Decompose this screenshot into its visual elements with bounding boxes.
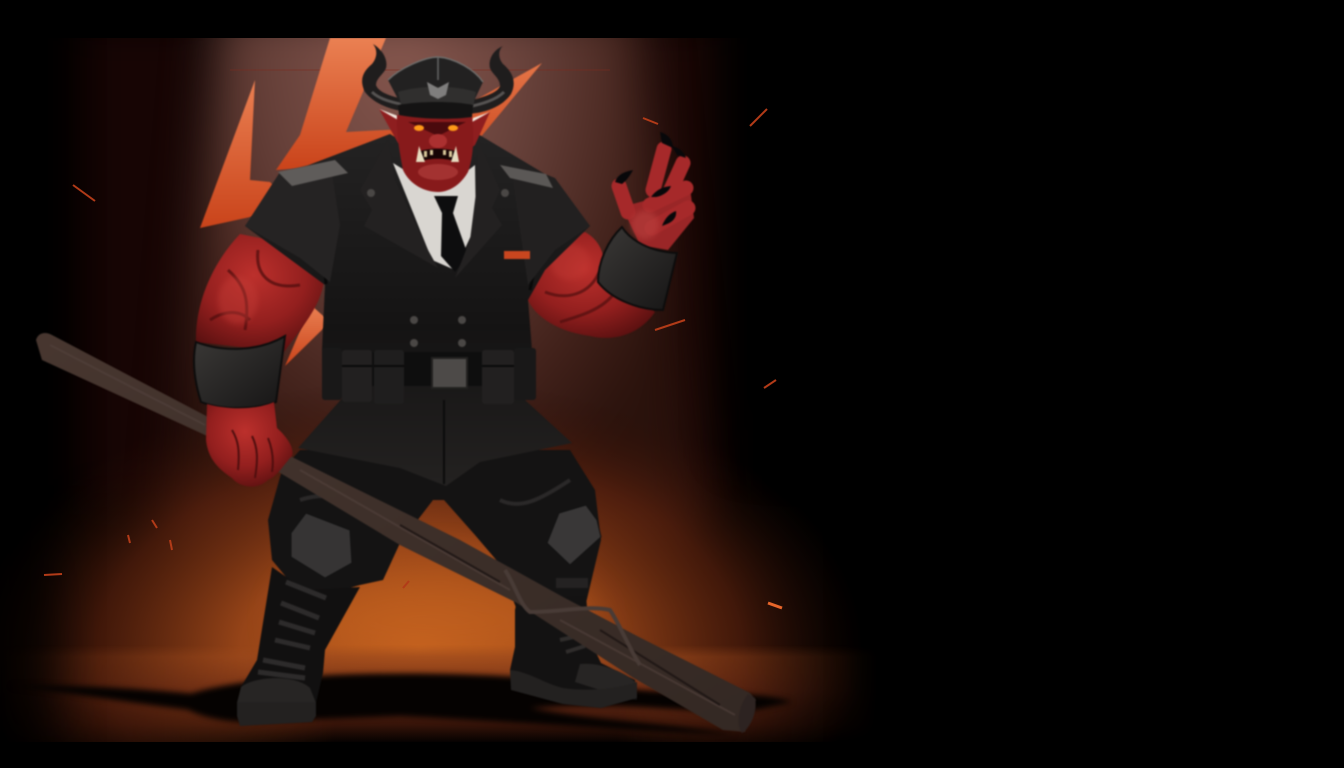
right sleeve — [510, 160, 590, 285]
orange smoke haze — [0, 378, 900, 768]
illustration: demon officer with staff — [16, 38, 859, 742]
face — [397, 115, 473, 192]
ember sparks — [44, 109, 782, 608]
right wrist bracer — [598, 227, 677, 310]
right hand with claws — [615, 132, 694, 250]
right boot — [510, 578, 637, 708]
left upper arm — [196, 234, 324, 352]
jacket buttons — [367, 189, 509, 347]
pants — [268, 450, 601, 610]
right arm, raised — [527, 232, 655, 338]
left sleeve — [245, 160, 340, 282]
pocket badge — [504, 251, 530, 259]
right epaulette — [500, 165, 553, 188]
demon head — [379, 109, 490, 192]
claws — [615, 132, 686, 226]
dim side walls — [80, 20, 720, 500]
ears — [379, 109, 412, 150]
backdrop wall with spotlight — [170, 10, 700, 540]
left wrist bracer — [194, 336, 285, 408]
mouth with teeth — [420, 149, 456, 161]
edge vignette — [0, 0, 1070, 768]
floor shadow — [10, 674, 792, 735]
floor — [48, 648, 856, 742]
white shirt — [393, 163, 476, 270]
jacket body and skirt — [245, 134, 590, 486]
necktie — [434, 196, 468, 272]
left epaulette — [278, 160, 348, 186]
tusks — [416, 146, 425, 162]
orange lightning shapes — [200, 38, 542, 366]
figure: demon officer — [36, 44, 756, 733]
left boot — [237, 567, 360, 726]
staff — [36, 333, 756, 733]
right knee pad — [547, 505, 601, 565]
nose — [429, 134, 447, 148]
officer cap — [388, 57, 483, 119]
eyes — [414, 125, 424, 131]
utility belt — [322, 348, 536, 404]
jacket lapels — [360, 140, 502, 278]
left hand gripping staff — [206, 402, 293, 487]
left knee pad — [291, 513, 352, 578]
horns — [362, 44, 514, 114]
